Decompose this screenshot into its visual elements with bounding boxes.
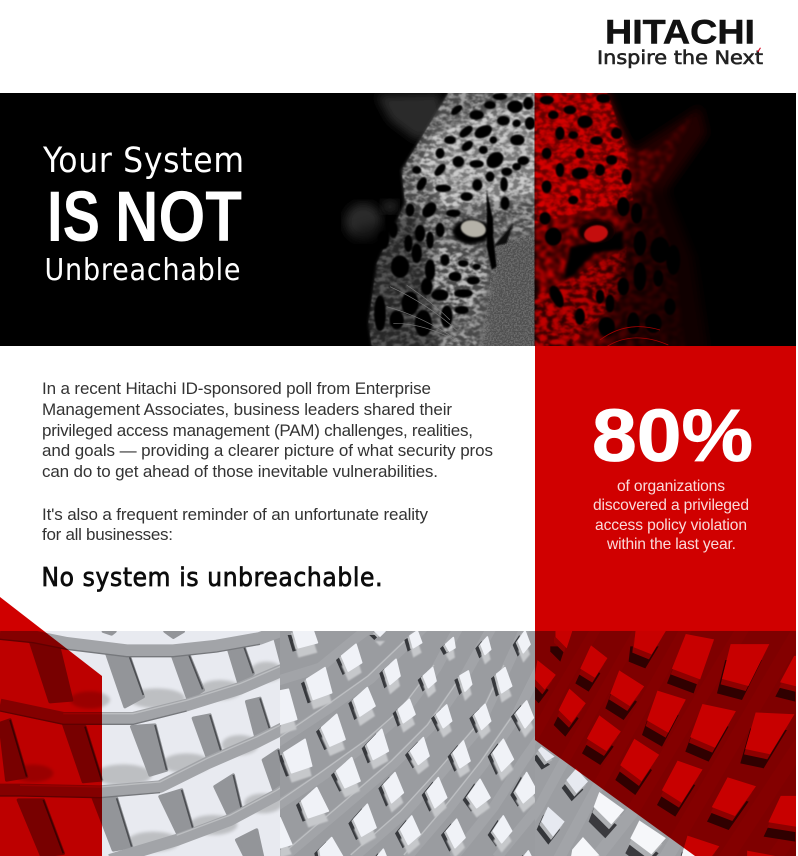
window panes (538, 747, 588, 837)
red spots (540, 95, 679, 335)
red eye (583, 223, 609, 244)
cross beams (0, 631, 297, 856)
title: IS (47, 178, 100, 257)
white right margin (796, 0, 798, 856)
panel: red statistic (535, 346, 796, 631)
spots (375, 94, 534, 335)
pane dark side wedges (274, 635, 531, 856)
reminder paragraph (42, 505, 428, 544)
beam dark edges (9, 648, 280, 854)
logo: Hitachi Inspire the Next: HITACHI (605, 14, 755, 52)
statistic number: 80% (592, 394, 753, 477)
building photo strip: left part (0, 631, 280, 856)
darkened lower left flank (353, 210, 440, 357)
grey half of leopard face (345, 90, 547, 357)
pane shadows (533, 755, 583, 845)
reminder paragraph: It's also a frequent reminder of an unfortunate reality (42, 505, 428, 524)
statistic caption: discovered a privileged (593, 497, 749, 514)
grey eye (459, 218, 487, 239)
leopard image, grey half and red half (345, 90, 707, 357)
intro paragraph: and goals — providing a clearer picture of what security pros (42, 441, 493, 460)
title: NOT (115, 178, 242, 257)
title: Unbreachable (44, 253, 240, 288)
curved ribs (0, 628, 287, 651)
title: Your System (42, 141, 244, 181)
diagonal ribs (455, 627, 597, 856)
building photo strip: middle part (274, 628, 543, 856)
pane shading (13, 662, 283, 852)
statistic caption: of organizations (617, 478, 725, 495)
darkened lower right flank (600, 190, 707, 357)
intro paragraph: Management Associates, business leaders shared their (42, 400, 452, 419)
building photo strip: right part (535, 631, 796, 856)
muzzle (478, 231, 534, 346)
window panes (280, 631, 537, 856)
red half of leopard face (535, 90, 707, 357)
red overlay: lower right polygon (535, 631, 796, 856)
closing statement: No system is unbreachable. (42, 563, 382, 593)
intro paragraph: In a recent Hitachi ID-sponsored poll from Enterprise (42, 379, 431, 398)
logo: Hitachi Inspire the Next: Inspire the Next (597, 48, 763, 69)
hero banner: black background (0, 93, 796, 346)
whiskers (387, 285, 460, 343)
intro paragraph: can do to get ahead of those inevitable vulnerabilities. (42, 462, 438, 481)
intro paragraph: privileged access management (PAM) challenges, realities, (42, 421, 473, 440)
intro paragraph (42, 379, 493, 481)
statistic caption (593, 478, 749, 553)
title (42, 141, 244, 288)
reminder paragraph: for all businesses: (42, 525, 173, 544)
red overlay: lower left polygon (0, 597, 102, 856)
muzzle crease (487, 190, 497, 270)
statistic caption: access policy violation (595, 517, 747, 534)
logo: Hitachi Inspire the Next (597, 14, 763, 69)
statistic caption: within the last year. (606, 536, 736, 553)
diagonal ribs (277, 628, 370, 681)
pane shading below windows (280, 641, 537, 856)
